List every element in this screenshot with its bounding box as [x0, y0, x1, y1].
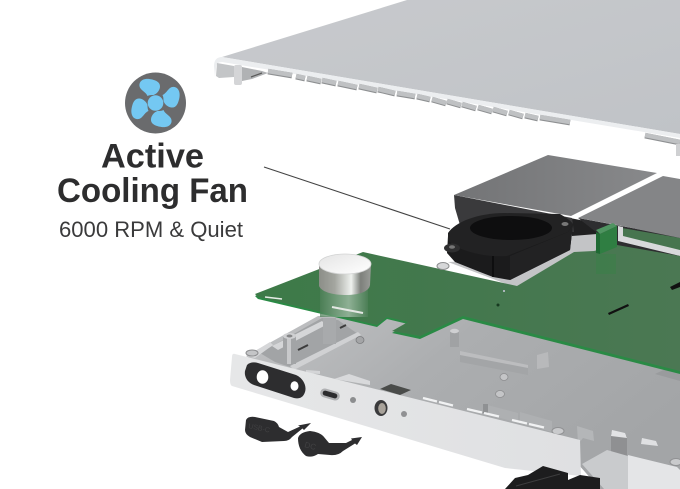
printed circuit board	[255, 245, 680, 374]
upright clip one	[577, 426, 594, 444]
wall blocks	[483, 404, 564, 434]
USB-C port	[319, 387, 341, 402]
front face	[230, 354, 581, 476]
slot lip	[618, 226, 680, 256]
rear ports ridges	[306, 370, 370, 385]
cover snap tabs	[268, 71, 680, 143]
fan intake	[470, 216, 552, 240]
title: Active	[101, 138, 204, 176]
fan top face	[448, 213, 573, 256]
chassis floor	[246, 316, 680, 489]
mount right	[562, 222, 568, 226]
title: Cooling Fan	[57, 172, 248, 210]
board surface	[255, 245, 680, 371]
interior board slot	[618, 228, 680, 250]
fan housing	[447, 224, 573, 280]
small hole	[401, 411, 407, 417]
lower floor lighter strip	[582, 450, 628, 489]
small hole	[350, 397, 356, 403]
slot right	[670, 282, 680, 290]
rubber plug USB-C	[245, 417, 311, 442]
fan right side	[510, 224, 573, 280]
cover top surface	[222, 0, 680, 134]
metal clip two	[611, 430, 627, 459]
dark rail holes	[298, 325, 346, 350]
rear rail channel	[260, 318, 358, 367]
heatsink right	[578, 176, 680, 258]
cover front lip	[214, 57, 680, 138]
block top	[454, 155, 657, 216]
metal clip three	[641, 438, 658, 461]
DC label: DC	[303, 440, 317, 452]
heatsink left	[454, 155, 657, 232]
floor pad	[655, 366, 680, 381]
screw mount left	[246, 350, 258, 356]
board pad	[503, 290, 505, 292]
capacitor	[319, 254, 371, 295]
housing seam	[492, 256, 494, 277]
capacitor reflection on board	[320, 285, 368, 317]
screw near fan	[437, 262, 449, 270]
board hole	[496, 304, 500, 306]
block front	[454, 195, 574, 232]
USB-C label: USB-C	[248, 423, 270, 434]
cooling fan	[444, 213, 573, 280]
chassis front panel with ports	[230, 354, 680, 489]
icon: fan blades	[131, 79, 180, 127]
front face right section	[628, 455, 680, 489]
floor bosses	[496, 374, 508, 398]
standoff post rear	[323, 318, 336, 344]
power button cutout	[245, 362, 306, 398]
button hole large	[257, 370, 268, 384]
right block front	[578, 218, 680, 258]
gap under fan	[448, 225, 596, 288]
icon: fan badge	[125, 72, 186, 134]
board edge	[255, 247, 680, 374]
slot left	[265, 297, 282, 299]
inner ledge	[290, 332, 361, 370]
cover right clip	[676, 144, 680, 156]
icon: fan hub	[148, 95, 163, 111]
floor plate	[246, 316, 680, 489]
mid standoff	[450, 329, 459, 347]
long bracket	[460, 354, 528, 375]
capacitor slot	[332, 307, 363, 313]
DC jack	[374, 400, 388, 416]
rubber plug DC	[298, 431, 362, 457]
black connector bottom	[505, 466, 600, 489]
button hole small	[290, 381, 298, 391]
green connector	[596, 223, 617, 274]
top-face ledge highlights	[423, 398, 544, 428]
slot	[608, 304, 629, 315]
title	[57, 138, 248, 210]
dark floor square	[380, 384, 411, 395]
dark shadow under heatsink	[570, 218, 600, 236]
leader line	[264, 167, 450, 229]
mount left	[444, 244, 460, 252]
top cover	[214, 0, 680, 156]
left corner clips	[216, 63, 268, 85]
screw mount right	[670, 458, 680, 466]
right block top	[578, 176, 680, 238]
small screw boss	[356, 336, 364, 344]
bracket clip	[537, 352, 549, 369]
subtitle: 6000 RPM & Quiet	[59, 217, 243, 242]
standoff post front	[283, 333, 296, 364]
